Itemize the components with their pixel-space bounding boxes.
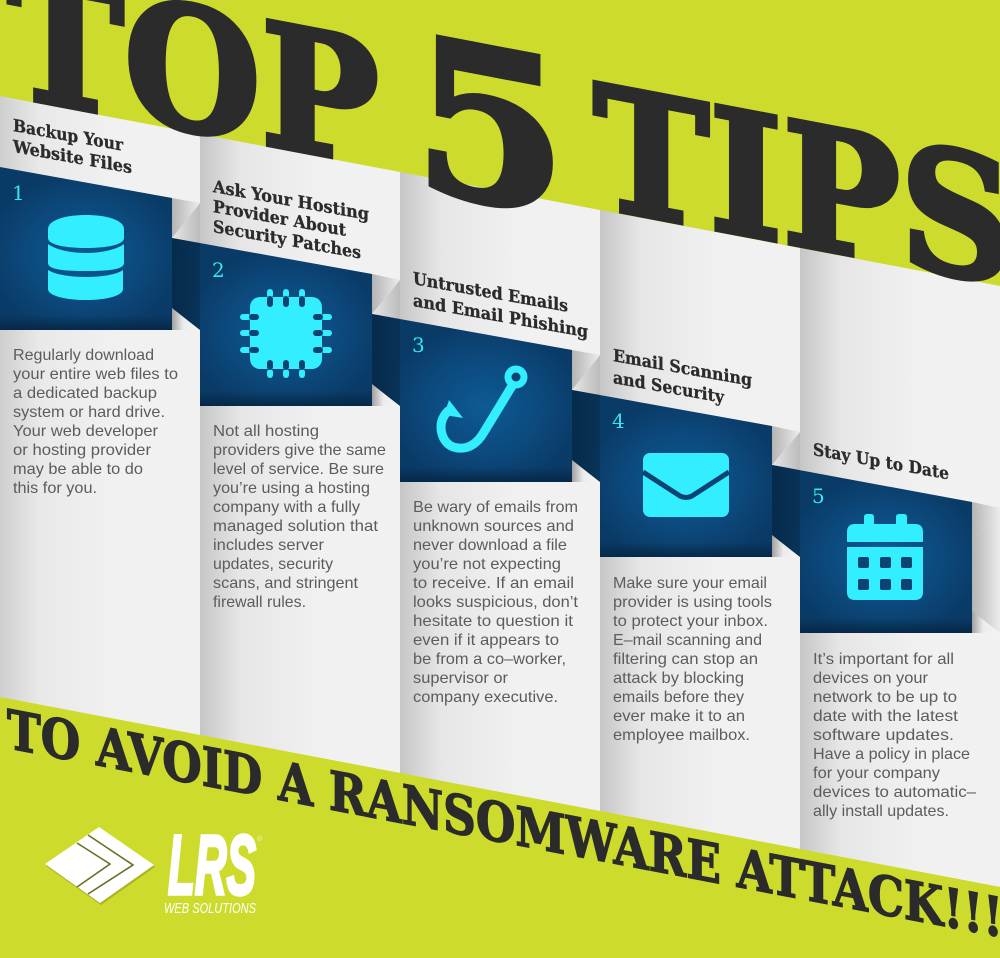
body text: tip 5: network to be up to (813, 689, 957, 706)
body text: tip 3: be from a co–worker, (413, 651, 566, 668)
fold: tip 1 header corner (172, 198, 200, 238)
fold: tip 2 to 3 connector (372, 280, 400, 319)
fold: tip 4 lower triangle (772, 535, 800, 557)
heading: tip 3: Untrusted Emails (413, 269, 568, 317)
body text: tip 1: or hosting provider (13, 442, 152, 459)
number 2: 2 (212, 258, 225, 282)
panel: tip 5 column (772, 248, 1000, 887)
icon panel: tip 2 (172, 238, 372, 406)
body text: tip 2 (213, 423, 386, 611)
body text: tip 5: It’s important for all (813, 651, 954, 668)
icon: calendar (847, 514, 923, 600)
body text: tip 3: even if it appears to (413, 632, 559, 649)
panel: tip 4 column (572, 210, 800, 849)
heading: tip 3: and Email Phishing (413, 291, 588, 342)
icon: database (48, 215, 124, 300)
logo mark: chevron diamond (45, 827, 155, 905)
fold: tip 3 header corner (572, 350, 600, 390)
body text: tip 3: company executive. (413, 689, 558, 706)
body text: tip 5: devices on your (813, 670, 929, 687)
icon: envelope (643, 453, 729, 517)
body text: tip 3: you’re not expecting (413, 556, 561, 573)
body text: tip 3 (413, 499, 579, 706)
body text: tip 2: level of service. Be sure (213, 461, 384, 478)
body text: tip 3: unknown sources and (413, 518, 574, 535)
panel: tip 2 column (172, 134, 400, 773)
registered mark: ® (257, 835, 263, 843)
body text: tip 1: may be able to do (13, 461, 143, 478)
body text: tip 5 (813, 651, 976, 820)
fold: right edge (972, 502, 1000, 633)
logo tagline: WEB SOLUTIONS (164, 900, 256, 917)
body text: tip 4: filtering can stop an (613, 651, 758, 668)
body text: tip 4: provider is using tools (613, 594, 772, 611)
body text: tip 4: ever make it to an (613, 708, 745, 725)
icon panel: tip 1 (0, 162, 172, 330)
body text: tip 4: attack by blocking (613, 670, 744, 687)
body text: tip 4: E–mail scanning and (613, 632, 762, 649)
heading: tip 4: Email Scanning (613, 346, 752, 391)
fold: tip 1 lower triangle (172, 308, 200, 330)
body text: tip 2: updates, security (213, 556, 333, 573)
number 1: 1 (12, 181, 25, 205)
body text: tip 3: supervisor or (413, 670, 509, 687)
number 5: 5 (812, 484, 825, 508)
body text: tip 2: includes server (213, 537, 325, 554)
icon panel: tip 4 (572, 390, 772, 557)
body text: tip 2: providers give the same (213, 442, 386, 459)
body text: tip 4 (613, 575, 772, 744)
body text: tip 5: date with the latest (813, 708, 959, 725)
body text: tip 5: Have a policy in place (813, 746, 970, 763)
body text: tip 1: this for you. (13, 480, 97, 497)
panel: tip 1 text background (0, 330, 200, 735)
body text: tip 4: emails before they (613, 689, 744, 706)
heading: tip 1 (12, 116, 132, 178)
body text: tip 2: Not all hosting (213, 423, 319, 440)
heading: tip 2: Ask Your Hosting (212, 177, 369, 225)
heading: tip 5: Stay Up to Date (813, 440, 949, 484)
body text: tip 5: ally install updates. (813, 803, 949, 820)
body text: tip 4: to protect your inbox. (613, 613, 768, 630)
body text: tip 2: scans, and stringent (213, 575, 359, 592)
body text: tip 1: Regularly download (13, 347, 154, 364)
body text: tip 5: software updates. (813, 727, 954, 744)
fold: tip 4 to 5 connector (772, 432, 800, 470)
body text: tip 2: managed solution that (213, 518, 379, 535)
fold: tip 3 to 4 connector (572, 355, 600, 395)
body text: tip 3: to receive. If an email (413, 575, 574, 592)
body text: tip 2: company with a fully (213, 499, 360, 516)
body text: tip 1: system or hard drive. (13, 404, 165, 421)
heading: tip 1: Backup Your (13, 116, 124, 156)
fold: tip 1 to 2 connector (172, 203, 200, 243)
logo: LRS Web Solutions (45, 818, 263, 917)
fold: tip 2 lower triangle (372, 384, 400, 406)
icon panel: tip 5 (772, 465, 972, 633)
body text: tip 3: Be wary of emails from (413, 499, 578, 516)
body text: tip 3: hesitate to question it (413, 613, 574, 630)
body text: tip 1 (13, 347, 178, 497)
icon: fish hook (441, 369, 524, 448)
panel: tip 1 column (0, 96, 200, 735)
body text: tip 3: never download a file (413, 537, 567, 554)
body text: tip 5: for your company (813, 765, 940, 782)
body text: tip 2: you’re using a hosting (213, 480, 370, 497)
body text: tip 2: firewall rules. (213, 594, 306, 611)
body text: tip 5: devices to automatic– (813, 784, 976, 801)
heading: tip 2: Security Patches (213, 217, 361, 264)
fold: tip 3 lower triangle (572, 460, 600, 482)
logo wordmark: LRS (168, 818, 256, 912)
lime bottom band (0, 697, 1000, 958)
fold: tip 2 header corner (372, 274, 400, 314)
body text: tip 4: employee mailbox. (613, 727, 750, 744)
heading: tip 4: and Security (613, 368, 725, 408)
body text: tip 4: Make sure your email (613, 575, 767, 592)
body text: tip 3: looks suspicious, don’t (413, 594, 579, 611)
number 4: 4 (612, 409, 625, 433)
fold: tip 4 header corner (772, 426, 800, 465)
number 3: 3 (412, 333, 425, 357)
title: TOP 5 TIPS (7, 0, 1000, 326)
heading: tip 3 (413, 269, 588, 342)
heading: tip 1: Website Files (12, 137, 132, 178)
body text: tip 1: a dedicated backup (13, 385, 157, 402)
body text: tip 1: your entire web files to (13, 366, 178, 383)
icon panel: tip 3 (372, 314, 572, 482)
heading: tip 2: Provider About (213, 197, 346, 241)
heading: tip 2 (212, 177, 369, 264)
body text: tip 1: Your web developer (13, 423, 159, 440)
icon: chip (240, 289, 332, 378)
panel: tip 3 column (372, 172, 600, 811)
